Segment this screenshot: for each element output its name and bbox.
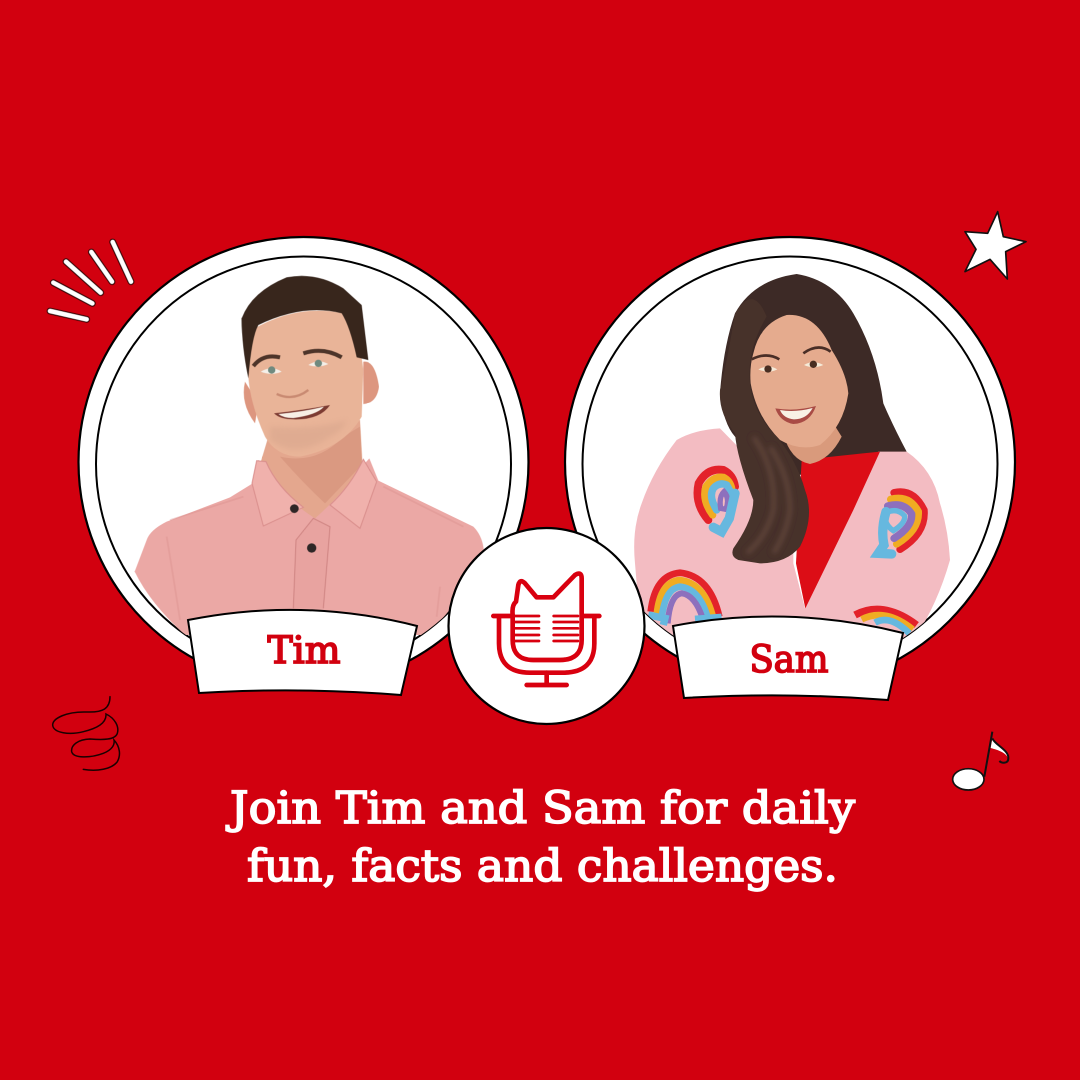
shirt	[135, 458, 484, 635]
shirt placket	[293, 518, 330, 608]
banner shape: Sam	[673, 617, 903, 700]
icon: music note	[953, 732, 1008, 790]
back hair	[720, 274, 907, 477]
eyes	[261, 361, 328, 374]
ears	[244, 362, 379, 423]
icon: star	[965, 212, 1026, 279]
mouth	[775, 406, 816, 424]
brows	[253, 351, 342, 366]
collar	[252, 459, 377, 528]
photo: Sam	[634, 274, 950, 640]
caption line 2: fun, facts and challenges.	[247, 841, 838, 892]
face	[248, 311, 363, 457]
hair	[242, 276, 368, 378]
buttons	[290, 504, 299, 513]
shirt seam shading	[167, 487, 463, 620]
icon: spiral	[53, 697, 119, 770]
icon: cat microphone	[493, 574, 599, 685]
stubble	[273, 426, 338, 446]
neck	[786, 428, 842, 464]
inner ring: Tim	[96, 256, 511, 672]
hair highlights	[747, 437, 790, 553]
nose	[277, 390, 308, 397]
caption	[226, 783, 855, 892]
inner ring: Sam	[582, 256, 998, 672]
outer ring: Tim	[78, 237, 528, 687]
neck shadow	[280, 427, 362, 503]
brows	[752, 348, 831, 359]
red top	[796, 452, 880, 608]
name: Tim: Tim	[268, 629, 340, 672]
banner: Sam	[673, 617, 903, 700]
name: Sam: Sam	[750, 638, 828, 681]
banner shape: Tim	[188, 610, 417, 695]
badge circle	[448, 528, 644, 724]
rainbow: right sleeve	[878, 492, 924, 554]
panel: Sam portrait	[565, 237, 1015, 687]
rainbow: left sleeve	[698, 470, 735, 532]
mouth	[274, 405, 330, 419]
front hair	[720, 299, 809, 563]
badge: microphone cat logo	[448, 528, 644, 724]
cardigan	[634, 428, 950, 640]
banner: Tim	[188, 610, 417, 695]
rainbow: bottom-right sleeve	[855, 609, 917, 633]
panel: Tim portrait	[78, 237, 528, 687]
caption line 1: Join Tim and Sam for daily	[226, 783, 855, 834]
icon: burst lines	[50, 242, 131, 319]
neck	[258, 420, 363, 518]
photo: Tim	[135, 276, 484, 635]
face	[750, 315, 848, 447]
outer ring: Sam	[565, 237, 1015, 687]
rainbow: bottom-left sleeve	[648, 573, 722, 625]
eyes	[758, 362, 823, 372]
